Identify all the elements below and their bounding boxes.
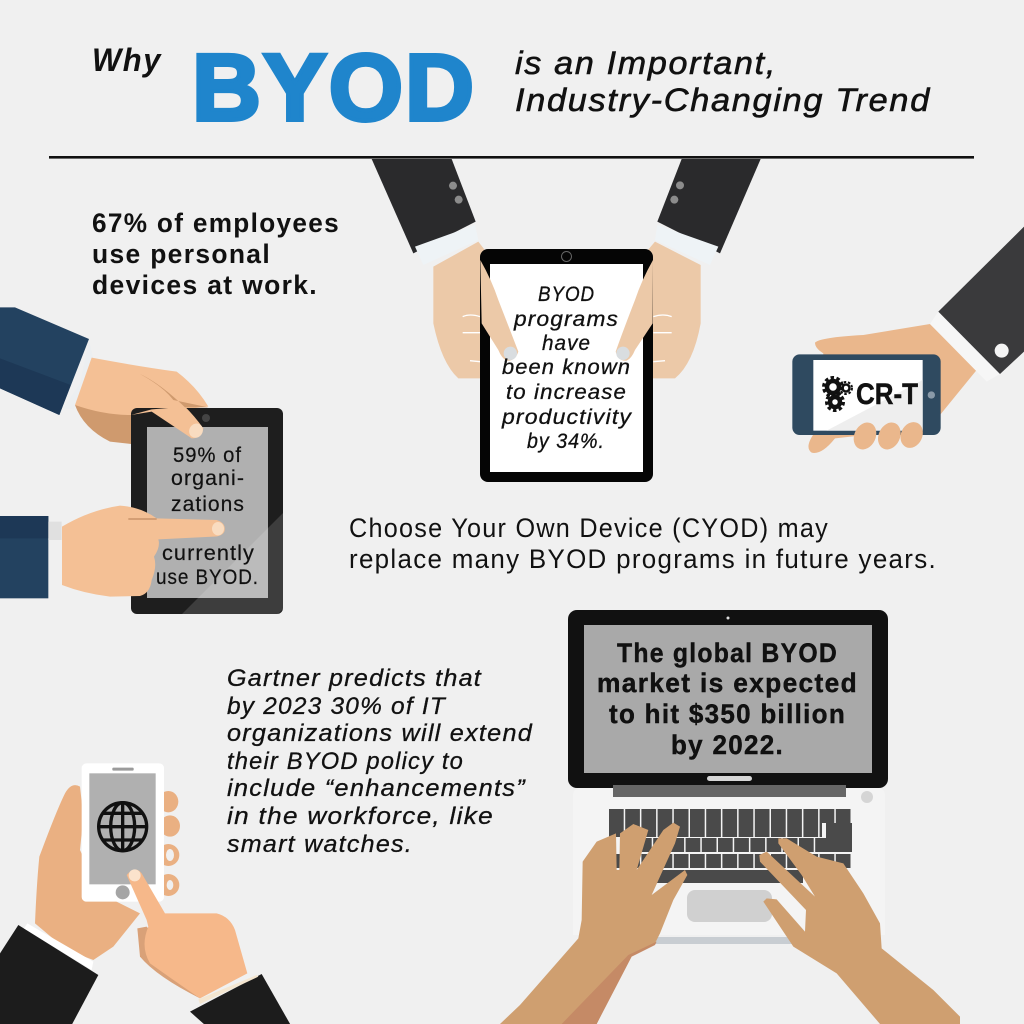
illustration: laptop with market stat xyxy=(500,610,960,1024)
right typing hand xyxy=(759,838,960,1024)
lower cuff xyxy=(48,522,62,540)
cuff xyxy=(930,312,1000,382)
text: Gartner prediction xyxy=(227,665,533,858)
left cuff and palm xyxy=(415,225,495,378)
right sleeve xyxy=(190,974,291,1024)
back finger xyxy=(137,927,200,998)
phone body xyxy=(82,763,164,902)
phone xyxy=(792,354,941,435)
text: Gartner prediction: by 2023 30% of IT xyxy=(227,693,447,720)
tablet text xyxy=(501,283,632,453)
title xyxy=(92,35,931,141)
title: BYOD xyxy=(192,35,476,141)
tablet body xyxy=(131,408,283,614)
laptop base xyxy=(573,787,885,935)
left thumb xyxy=(480,260,518,361)
upper palm xyxy=(75,405,131,444)
left sleeve xyxy=(0,923,98,1024)
illustration: hands holding tablet with productivity stat xyxy=(372,159,761,482)
text: Gartner prediction: organizations will extend xyxy=(227,720,533,747)
hand xyxy=(808,324,977,453)
CR-T logo: CR-T xyxy=(856,378,918,411)
text: Gartner prediction: Gartner predicts that xyxy=(227,665,482,692)
tablet screen xyxy=(490,264,643,472)
upper hand xyxy=(75,358,208,415)
lower sleeve xyxy=(0,516,48,598)
tablet text: have xyxy=(542,332,591,355)
stat: 67% of employees: 67% of employees xyxy=(92,208,340,238)
pointing hand xyxy=(62,506,225,597)
stat: 67% of employees: devices at work. xyxy=(92,270,318,300)
trackpad xyxy=(687,890,772,922)
finger on upper tablet edge xyxy=(131,407,203,438)
tablet text: been known xyxy=(502,356,631,379)
right cuff and palm xyxy=(637,225,718,378)
text: Gartner prediction: their BYOD policy to xyxy=(227,748,464,775)
tablet text xyxy=(156,444,259,589)
tablet text: currently xyxy=(162,542,255,565)
tablet text: to increase xyxy=(506,381,627,404)
right sleeve xyxy=(657,159,761,253)
phone screen xyxy=(89,773,156,884)
tablet text: programs xyxy=(513,308,619,331)
laptop text: to hit $350 billion xyxy=(609,699,846,729)
tablet text: by 34%. xyxy=(527,430,605,453)
upper cuff xyxy=(63,341,93,409)
laptop text: by 2022. xyxy=(671,730,784,760)
pointing hand xyxy=(127,870,247,998)
text: Gartner prediction: include “enhancements” xyxy=(227,775,526,802)
text: CYOD: Choose Your Own Device (CYOD) may xyxy=(349,513,829,543)
holding fingers xyxy=(157,791,180,896)
right thumb xyxy=(616,260,653,361)
laptop text: The global BYOD xyxy=(617,638,838,668)
stat: 67% of employees: use personal xyxy=(92,239,271,269)
keyboard xyxy=(609,816,852,883)
title: Industry-Changing Trend xyxy=(515,82,931,118)
text: CYOD: replace many BYOD programs in future years. xyxy=(349,544,937,574)
left typing hand xyxy=(500,823,687,1024)
tablet text: organi- xyxy=(171,467,245,490)
fingers xyxy=(849,418,927,453)
title: is an Important, xyxy=(515,45,777,81)
laptop text xyxy=(597,638,858,760)
upper sleeve xyxy=(0,307,89,415)
tablet text: 59% of xyxy=(173,444,242,467)
tablet screen xyxy=(147,427,268,598)
screen glare xyxy=(182,513,283,614)
left sleeve xyxy=(372,159,476,253)
icon: globe xyxy=(99,803,147,851)
title: Why xyxy=(92,42,163,78)
tablet text: zations xyxy=(171,493,245,516)
phone screen xyxy=(813,360,923,431)
text: CYOD xyxy=(349,513,937,574)
sleeve xyxy=(938,227,1024,374)
laptop screen xyxy=(584,625,872,773)
illustration: hands on tablet with 59% stat xyxy=(0,307,283,614)
text: Gartner prediction: smart watches. xyxy=(227,831,413,858)
tablet text: use BYOD. xyxy=(156,566,259,589)
text: Gartner prediction: in the workforce, like xyxy=(227,803,494,830)
laptop lid xyxy=(568,610,888,788)
stat: 67% of employees xyxy=(92,208,340,300)
laptop text: market is expected xyxy=(597,668,858,698)
illustration: hands holding phone with globe xyxy=(0,763,291,1024)
holding hand xyxy=(35,785,140,960)
CR-T logo xyxy=(824,378,918,411)
tablet text: productivity xyxy=(501,406,632,429)
illustration: hand holding phone with CR-T logo xyxy=(792,227,1024,453)
tablet text: BYOD xyxy=(538,283,595,306)
tablet body xyxy=(480,249,653,482)
